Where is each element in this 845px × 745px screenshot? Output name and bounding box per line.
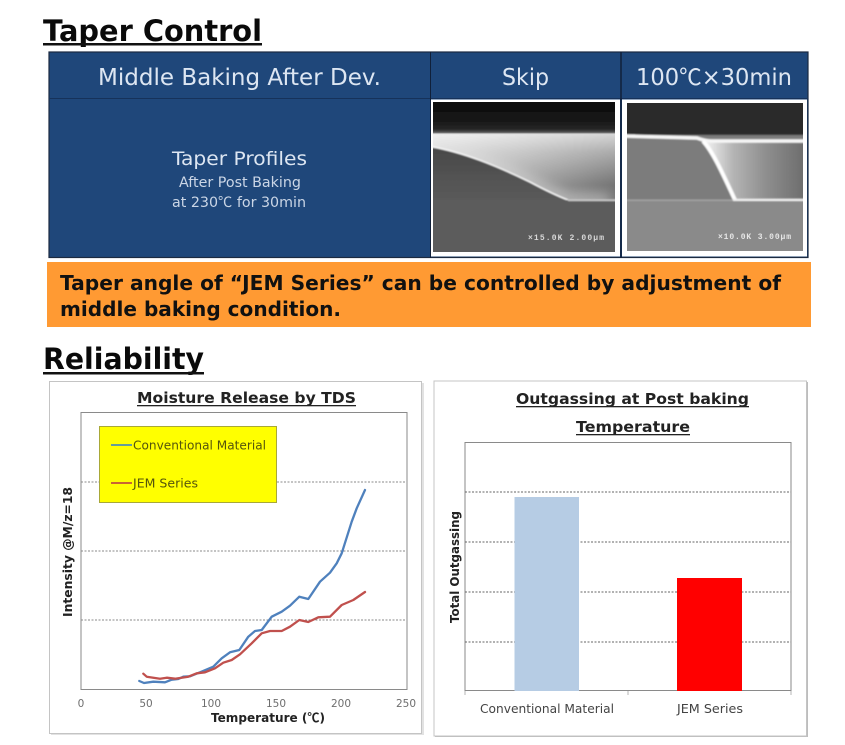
legend item: JEM Series: JEM Series (132, 476, 198, 490)
chart title: Outgassing at Post baking Temperature (516, 390, 749, 436)
image: SEM profile, 100℃ for 30 minutes (622, 100, 807, 256)
row label: taper profiles: Taper Profiles (171, 148, 307, 170)
legend (100, 426, 276, 502)
plot frame and grid lines (465, 442, 791, 695)
row label: taper profiles: After Post Baking (179, 175, 301, 191)
legend item: Conventional Material: Conventional Material (133, 438, 266, 452)
line: Conventional Material (139, 490, 365, 683)
header: Middle Baking After Dev.: Middle Baking After Dev. (98, 65, 381, 91)
callout: taper angle conclusion: Taper angle of “JEM Series” can be controlled by adjustment of (60, 271, 781, 295)
line: JEM Series (143, 592, 365, 679)
panel: moisture release line chart (50, 382, 424, 735)
category label: JEM Series: JEM Series (676, 701, 743, 716)
x axis ticks: 100 (201, 698, 221, 710)
chart title: Moisture Release by TDS: Moisture Release by TDS (137, 389, 356, 407)
y axis title: Intensity @M/z=18 (61, 487, 75, 617)
table: taper profiles (49, 52, 808, 258)
bar: JEM Series (677, 578, 742, 691)
chart title: Outgassing at Post baking Temperature: Temperature (576, 418, 690, 436)
header: Skip: Skip (502, 65, 549, 91)
y axis title: Total Outgassing (448, 511, 462, 623)
bar: Conventional Material (514, 497, 579, 691)
x axis ticks: 200 (331, 698, 351, 710)
callout: taper angle conclusion: middle baking condition. (60, 297, 341, 321)
x axis ticks: 50 (139, 698, 153, 710)
image: SEM profile, skip: ×15.0K 2.00μm (528, 234, 604, 243)
row label: taper profiles (171, 148, 307, 212)
x axis ticks (78, 698, 416, 710)
x axis title: Temperature (℃) (211, 707, 325, 726)
row label: taper profiles: at 230℃ for 30min (172, 192, 306, 212)
heading: Taper Control: Taper Control (43, 14, 262, 48)
chart title: Outgassing at Post baking Temperature: Outgassing at Post baking (516, 390, 749, 408)
category label: Conventional Material: Conventional Material (480, 701, 614, 716)
image: SEM profile, 100℃ for 30 minutes: ×10.0K 3.00μm (718, 233, 791, 242)
heading: Reliability: Reliability (43, 342, 204, 376)
panel: outgassing bar chart (434, 381, 808, 737)
plot frame and grid lines (81, 412, 407, 690)
x axis ticks: 150 (266, 698, 286, 710)
x axis ticks: 0 (78, 698, 84, 710)
x axis ticks: 250 (396, 698, 416, 710)
callout: taper angle conclusion (47, 262, 811, 327)
image: SEM profile, skip (430, 100, 620, 256)
header: 100℃×30min: 100℃×30min (636, 58, 792, 92)
